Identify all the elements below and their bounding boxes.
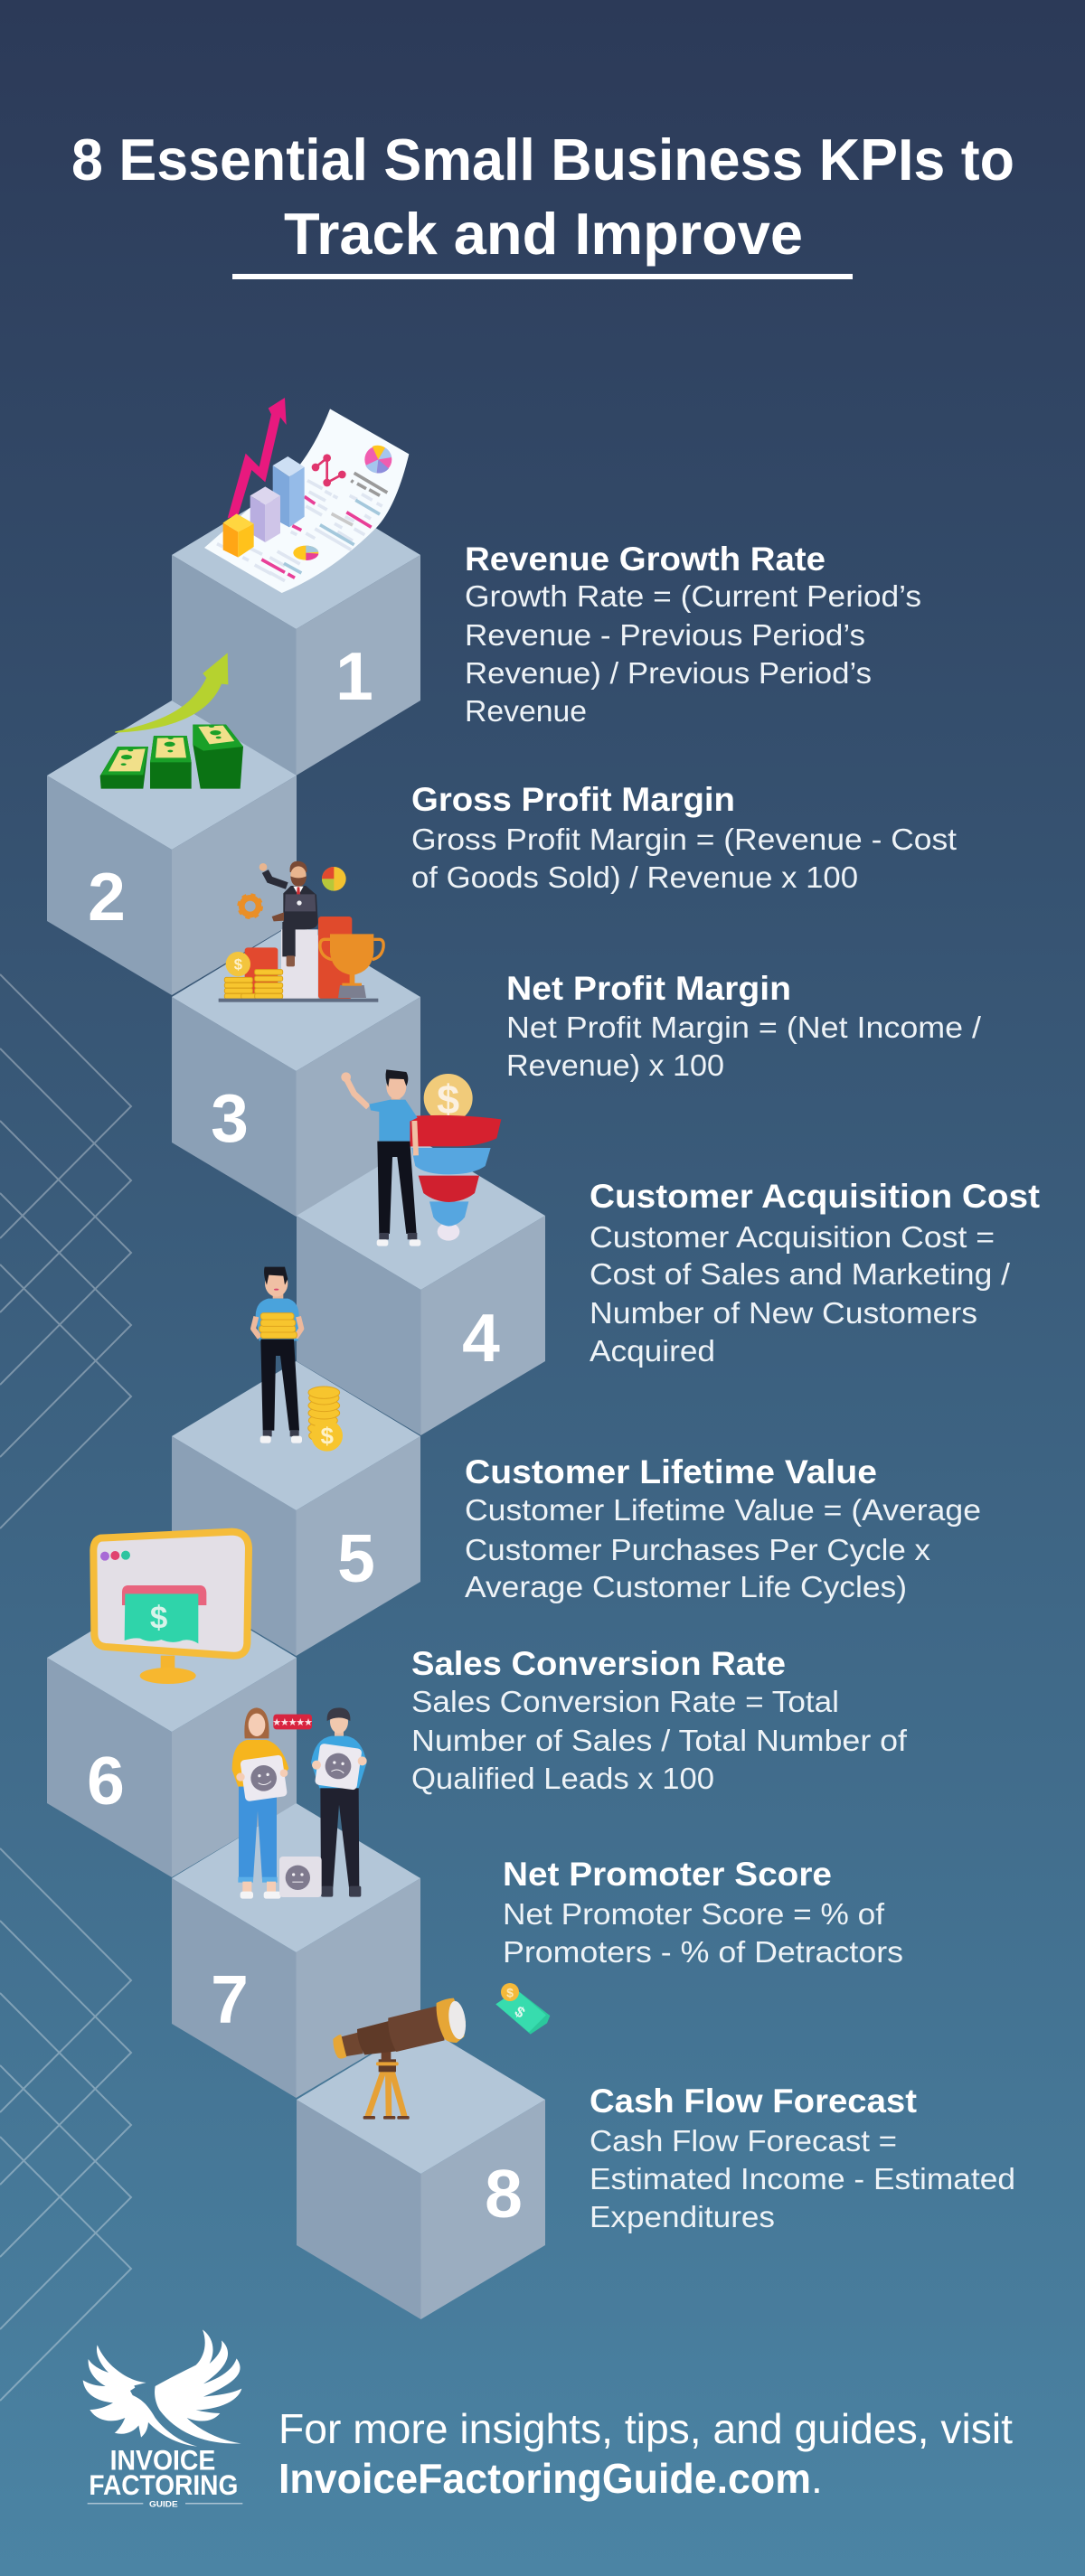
step cube 3 [172, 922, 420, 1217]
icon: dollar bill and coin: $ [512, 2003, 529, 2022]
text: Customer Acquisition Cost: Customer Acquisition Cost = [590, 1220, 995, 1254]
step cube 5: 5 [337, 1520, 375, 1596]
text: Net Promoter Score [503, 1856, 903, 1969]
step cube 4: 4 [462, 1300, 500, 1376]
step cube 8: 8 [485, 2156, 523, 2232]
step cube 6: 6 [87, 1743, 125, 1819]
text: Gross Profit Margin: of Goods Sold) / Revenue x 100 [411, 860, 858, 894]
text: Customer Acquisition Cost: Customer Acquisition Cost [590, 1178, 1040, 1215]
icon: stacks of money with green arrow [100, 653, 243, 789]
text: Revenue Growth Rate: Growth Rate = (Current Period’s [465, 579, 921, 613]
text: Customer Lifetime Value: Customer Lifetime Value [465, 1453, 877, 1490]
text: Revenue Growth Rate [465, 541, 921, 728]
text: Customer Acquisition Cost [590, 1178, 1040, 1368]
text: Revenue Growth Rate: Revenue Growth Rate [465, 541, 826, 578]
logo: Invoice Factoring Guide: GUIDE [149, 2500, 178, 2509]
text: Cash Flow Forecast [590, 2082, 1015, 2233]
text: Customer Acquisition Cost: Cost of Sales and Marketing / [590, 1257, 1011, 1291]
logo: Invoice Factoring Guide: INVOICE [110, 2445, 215, 2477]
text: Cash Flow Forecast: Expenditures [590, 2200, 775, 2233]
icon: two people holding satisfaction rating cards [232, 1707, 367, 1899]
step cube 4 [297, 1141, 545, 1435]
step cube 2 [47, 700, 297, 995]
step cube 1 [172, 480, 420, 776]
icon: dollar bill and coin: $ [506, 1985, 514, 1999]
text: Customer Acquisition Cost: Acquired [590, 1334, 715, 1368]
footer call to action: InvoiceFactoringGuide.com [278, 2455, 811, 2502]
footer call to action [278, 2405, 1013, 2502]
text: Net Promoter Score: Net Promoter Score = % of [503, 1897, 885, 1931]
logo: Invoice Factoring Guide [83, 2329, 242, 2509]
icon: two people holding satisfaction rating cards: ★★★★★ [272, 1718, 313, 1727]
icon: man waving next to red and blue sales funnel [341, 1069, 501, 1246]
icon: monitor with dollar receipt [93, 1532, 249, 1684]
text: Customer Lifetime Value: Customer Purchases Per Cycle x [465, 1533, 931, 1566]
footer call to action: For more insights, tips, and guides, visit [278, 2405, 1013, 2452]
icon: businessman on bar chart with trophy and coins: $ [234, 956, 243, 973]
text: Sales Conversion Rate: Sales Conversion Rate [411, 1645, 786, 1682]
step cube 5 [172, 1361, 420, 1656]
step cube 8 [297, 2025, 545, 2319]
text: Customer Lifetime Value: Average Customer Life Cycles) [465, 1570, 907, 1603]
title: 8 Essential Small Business KPIs to [71, 127, 1014, 193]
title [71, 127, 1014, 279]
icon: man holding gold coins with coin stack [253, 1267, 343, 1452]
step cube 7: 7 [211, 1961, 249, 2037]
step cube 7 [172, 1803, 420, 2098]
text: Sales Conversion Rate [411, 1645, 908, 1795]
text: Revenue Growth Rate: Revenue) / Previous Period’s [465, 656, 872, 690]
text: Gross Profit Margin [411, 781, 957, 894]
text: Cash Flow Forecast: Cash Flow Forecast [590, 2082, 917, 2120]
text: Revenue Growth Rate: Revenue [465, 694, 587, 728]
text: Net Promoter Score: Net Promoter Score [503, 1856, 832, 1893]
step cube 3: 3 [211, 1080, 249, 1156]
text: Customer Acquisition Cost: Number of New Customers [590, 1296, 977, 1330]
text: Gross Profit Margin: Gross Profit Margin = (Revenue - Cost [411, 823, 957, 856]
logo: Invoice Factoring Guide: FACTORING [89, 2469, 238, 2501]
text: Cash Flow Forecast: Estimated Income - Estimated [590, 2162, 1015, 2195]
title: Track and Improve [284, 201, 803, 267]
text: Customer Lifetime Value: Customer Lifetime Value = (Average [465, 1493, 981, 1527]
icon: businessman on bar chart with trophy and coins [219, 861, 383, 1002]
icon: report with bar chart and rising arrow [204, 398, 409, 593]
icon: man holding gold coins with coin stack: $ [320, 1422, 334, 1449]
icon: man waving next to red and blue sales funnel: $ [437, 1076, 459, 1123]
icon: monitor with dollar receipt: $ [150, 1601, 167, 1636]
text: Revenue Growth Rate: Revenue - Previous Period’s [465, 618, 865, 652]
text: Net Profit Margin: Revenue) x 100 [506, 1048, 724, 1082]
icon: telescope on tripod [333, 1998, 468, 2120]
text: Net Profit Margin: Net Profit Margin = (Net Income / [506, 1011, 982, 1044]
text: Sales Conversion Rate: Qualified Leads x 100 [411, 1762, 714, 1795]
icon: dollar bill and coin [495, 1983, 550, 2035]
text: Net Promoter Score: Promoters - % of Detractors [503, 1935, 903, 1969]
step cube 2: 2 [88, 859, 126, 935]
text: Cash Flow Forecast: Cash Flow Forecast = [590, 2124, 897, 2158]
text: Customer Lifetime Value [465, 1453, 981, 1603]
text: Net Profit Margin: Net Profit Margin [506, 970, 791, 1007]
step cube 1: 1 [335, 638, 373, 714]
text: Sales Conversion Rate: Number of Sales / Total Number of [411, 1724, 908, 1757]
step cube 6 [47, 1583, 297, 1877]
text: Gross Profit Margin: Gross Profit Margin [411, 781, 735, 818]
footer call to action: . [811, 2455, 823, 2502]
text: Net Profit Margin [506, 970, 982, 1082]
text: Sales Conversion Rate: Sales Conversion Rate = Total [411, 1685, 839, 1718]
